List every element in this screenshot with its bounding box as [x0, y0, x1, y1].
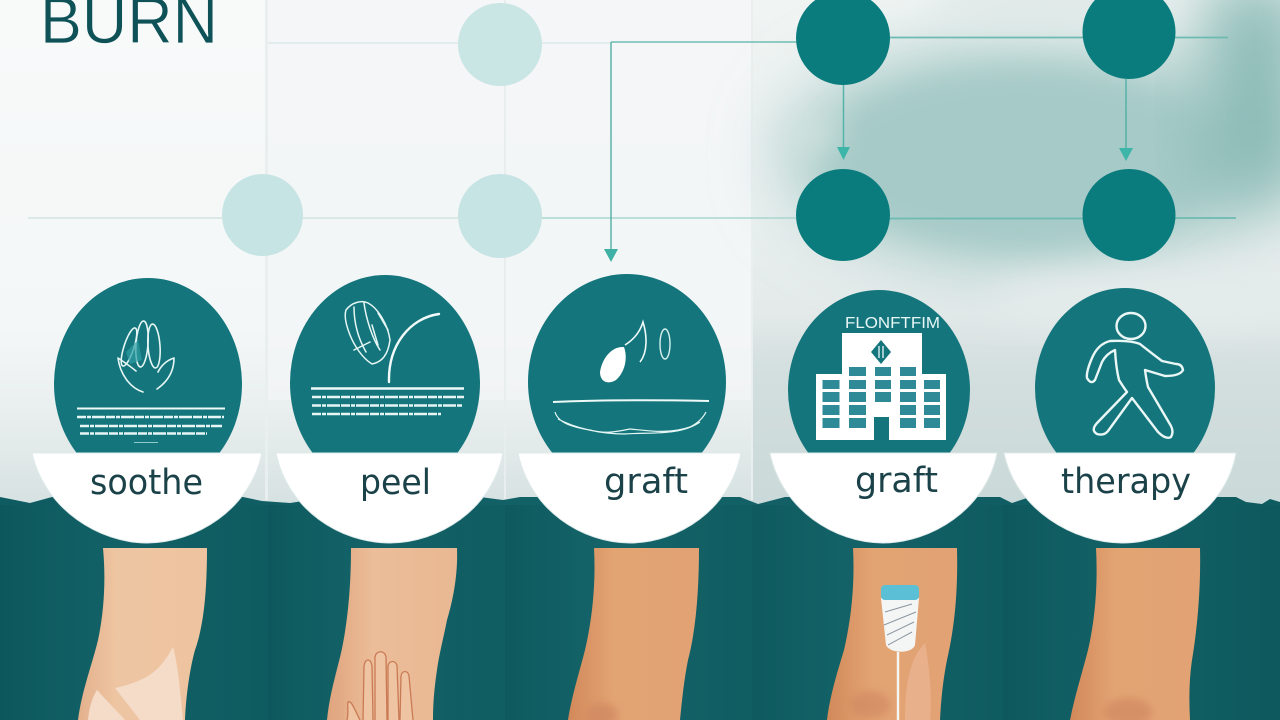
panel: soothe: [32, 278, 262, 720]
dark teal wave base: [0, 497, 1280, 720]
icon: walking figure: [1035, 288, 1215, 488]
connector lines: [28, 38, 1236, 218]
arm with hand: [327, 548, 457, 720]
icon: peeling skin: [290, 275, 480, 491]
panel: graft two: [770, 290, 997, 720]
label: soothe: [32, 453, 262, 543]
arm: [568, 548, 699, 720]
arrow: hospital step: [837, 85, 850, 160]
arm: [1070, 548, 1200, 720]
node: dark lower one: [796, 169, 890, 261]
node: faded centre: [458, 174, 542, 258]
icon: hospital: [788, 290, 970, 490]
label: therapy: therapy: [1061, 462, 1191, 502]
arm with bandage and drip: [827, 548, 957, 720]
label: graft: graft: [604, 462, 688, 502]
flow diagram: [28, 0, 1236, 262]
icon: hospital: FLONFTFIM: [845, 315, 940, 332]
label: graft: graft: [855, 461, 938, 501]
icon: bandage: [881, 585, 919, 720]
arrow: down to graft: [604, 42, 618, 262]
label: graft: [518, 453, 741, 543]
node: faded left: [222, 174, 303, 256]
node: faded top: [458, 3, 542, 86]
icon: soothing hand: [54, 278, 242, 490]
node: dark lower two: [1082, 169, 1176, 261]
icon: graft droplets: [528, 274, 726, 490]
label: therapy: [1004, 453, 1236, 543]
panel: therapy: [1004, 288, 1236, 720]
label: graft: [770, 453, 997, 543]
node: dark top one: [796, 0, 890, 85]
label: peel: [276, 453, 503, 543]
label: soothe: soothe: [90, 463, 203, 503]
node: dark top two: [1082, 0, 1176, 79]
label: peel: peel: [360, 463, 431, 503]
arm with pale burn patch: [78, 548, 207, 720]
panel: graft one: [518, 274, 741, 720]
panel: peel: [276, 275, 503, 720]
arrow: therapy step: [1119, 79, 1133, 161]
